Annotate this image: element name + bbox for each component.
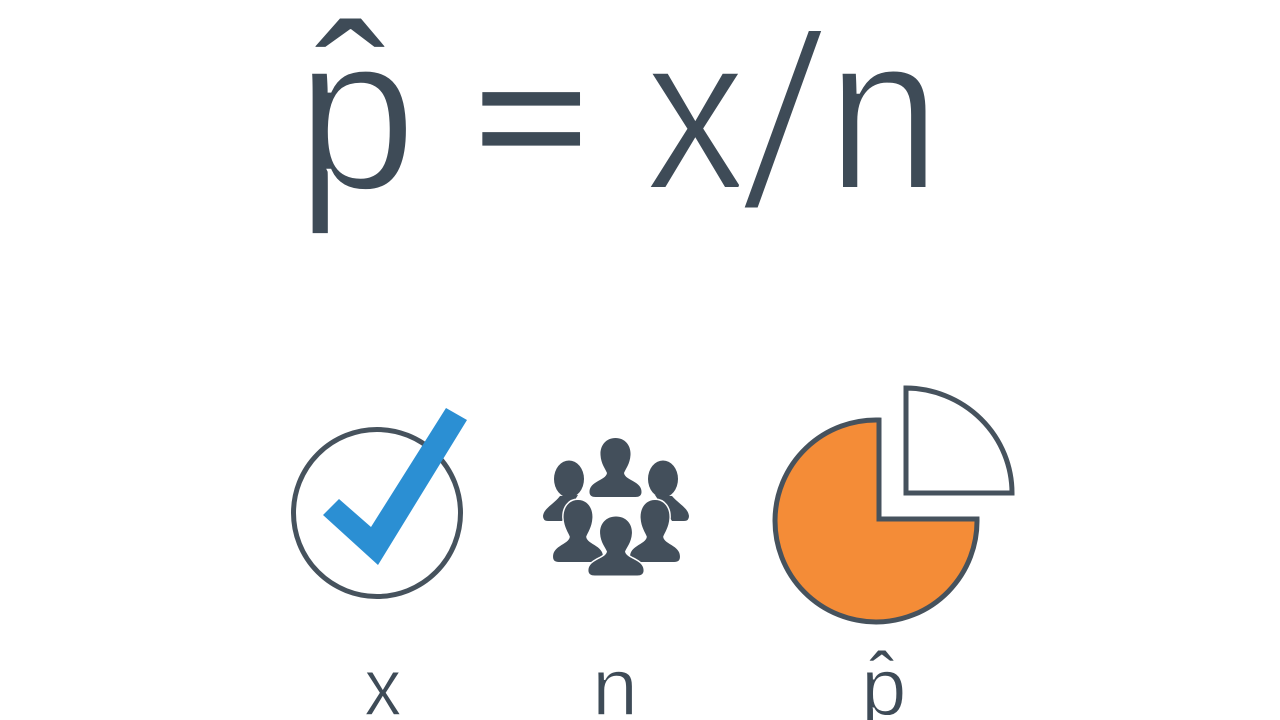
person front centre	[588, 516, 644, 576]
person top centre	[590, 438, 642, 497]
formula: p-hat = x/n	[296, 0, 941, 264]
pie detached slice	[906, 388, 1012, 493]
icon: group of people	[543, 438, 689, 576]
person back left	[543, 460, 584, 521]
formula equals sign: =	[474, 27, 588, 205]
person front right	[630, 500, 680, 562]
person front left	[553, 500, 603, 562]
pie main orange	[775, 420, 977, 622]
icon: check mark in circle	[294, 408, 467, 596]
icon: pie chart with detached slice	[775, 388, 1012, 622]
label p-hat: ˆ	[870, 637, 895, 720]
person back right	[648, 460, 689, 521]
